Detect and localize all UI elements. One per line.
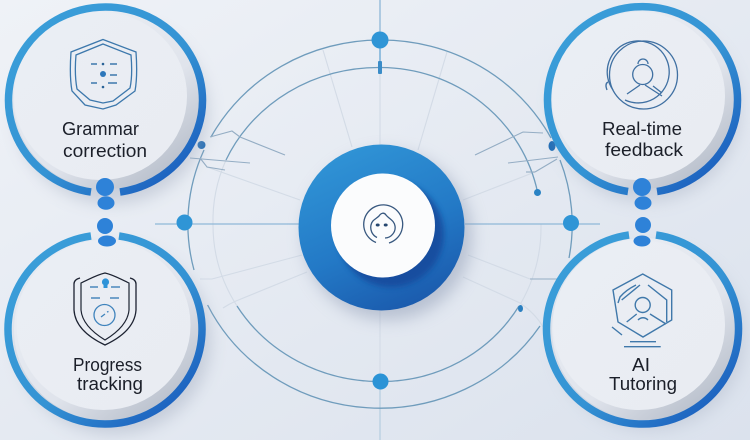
label: Progress: [73, 355, 142, 375]
ring: [8, 236, 202, 424]
label line 2: feedback: [605, 140, 684, 160]
node: bottom: [372, 374, 388, 390]
label: Real-time: [602, 119, 682, 139]
inner arc: [226, 67, 538, 382]
icon: shield: [74, 273, 136, 345]
label line 2: correction: [63, 141, 147, 161]
panel: real-time feedback: [548, 7, 740, 210]
connector blobs: [96, 178, 114, 210]
disc: [552, 12, 725, 180]
hub white disc: [331, 174, 435, 278]
hub inner shadow: [338, 181, 444, 287]
ring: [548, 7, 738, 192]
disc: [14, 12, 187, 180]
network lines: [155, 0, 600, 440]
radial spokes: [200, 0, 543, 440]
node: upper right dot: [548, 141, 556, 151]
label: AI: [632, 355, 650, 375]
axis lines: [155, 0, 600, 440]
node: top: [372, 32, 388, 48]
node: upper left dot: [198, 141, 206, 149]
disc: [553, 240, 725, 410]
panel: grammar correction: [8, 7, 208, 210]
ring: [8, 7, 202, 192]
connector blobs: [634, 217, 651, 246]
panel: progress tracking: [8, 218, 211, 434]
icon: person in circle: [606, 41, 678, 109]
outer arc: [188, 40, 572, 408]
circuit traces: [190, 131, 560, 279]
icon: hexagon shield: [70, 40, 137, 109]
inner plate: [14, 11, 200, 189]
inner plate: [14, 239, 202, 421]
node: lower right dot: [518, 305, 523, 312]
ring: [546, 235, 738, 424]
label line 2: tracking: [77, 374, 143, 394]
icon: face: [364, 205, 403, 243]
node: right: [563, 215, 579, 231]
panel shadow: [552, 18, 740, 202]
connector blobs: [97, 218, 116, 246]
hub shadow: [304, 152, 472, 320]
icon: hexagon tutor: [612, 274, 672, 347]
label line 2: Tutoring: [609, 374, 677, 394]
panel: AI tutoring: [546, 217, 745, 430]
panel shadow: [17, 246, 211, 434]
central hub: [298, 144, 472, 320]
label: Grammar: [62, 119, 139, 139]
node: small right: [534, 189, 541, 196]
disc: [16, 240, 190, 410]
inner plate: [552, 238, 736, 420]
hub ring: [298, 144, 464, 310]
panel shadow: [555, 246, 745, 430]
panel shadow: [16, 20, 208, 204]
inner plate: [552, 11, 734, 189]
node: left: [176, 214, 192, 230]
node: top small: [378, 61, 382, 74]
connector blobs: [633, 178, 652, 210]
